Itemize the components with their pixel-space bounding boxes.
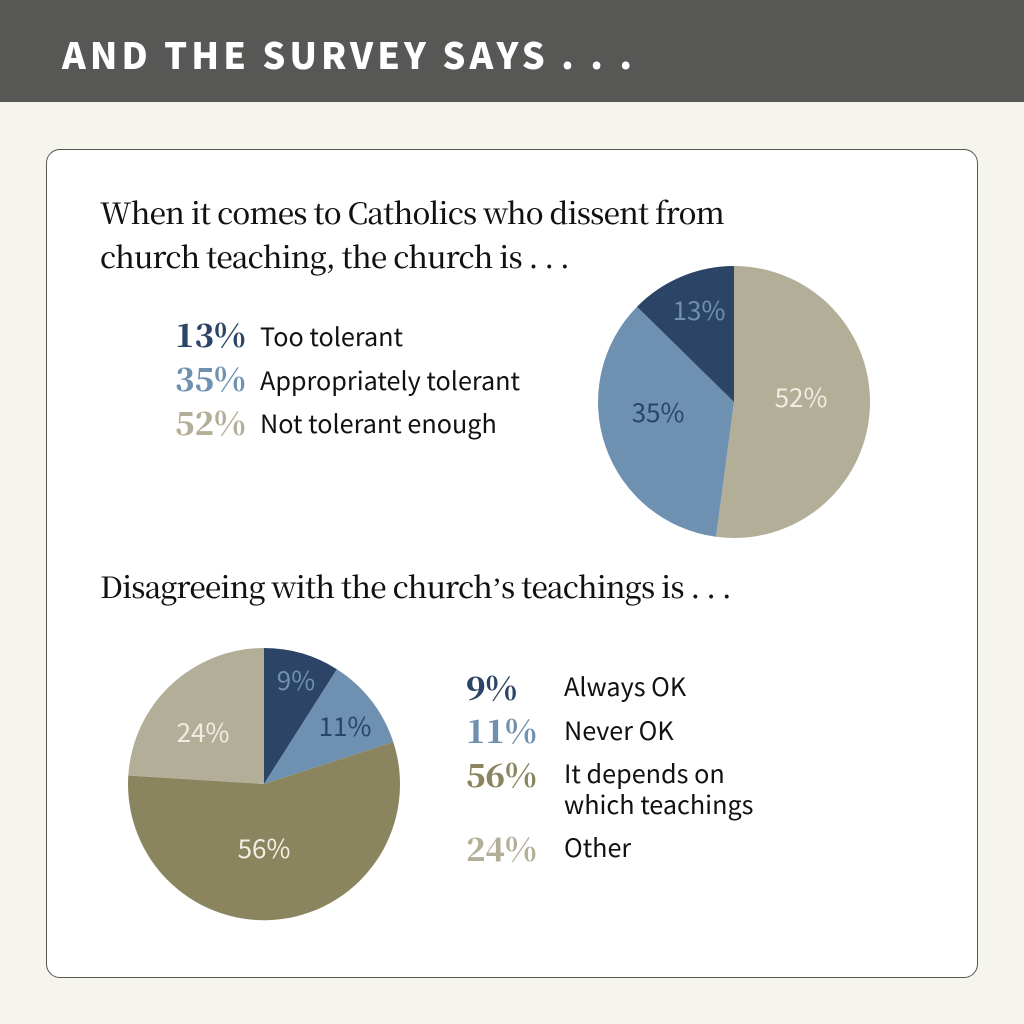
pie chart: question one: 52% [775, 378, 827, 415]
pie chart: question two: 9% [277, 661, 315, 698]
heading: question one: When it comes to Catholics who dissent from [100, 191, 724, 233]
legend value 9%: 9% [466, 664, 517, 710]
legend label never ok: Never OK [564, 712, 674, 748]
legend value 56%: 56% [466, 751, 537, 797]
pie chart: question one: 35% [632, 393, 684, 430]
pie chart: question one: 13% [673, 291, 725, 328]
pie chart: question two: 11% [319, 707, 371, 744]
legend label other: Other [564, 829, 631, 865]
heading: question one: church teaching, the church is . . . [100, 235, 569, 277]
legend: question two [466, 664, 753, 871]
legend value 11%: 11% [466, 707, 537, 753]
legend label it depends on which teachings: It depends on [564, 755, 725, 791]
legend value 52%: 52% [175, 399, 246, 445]
pie chart: question two: 56% [238, 829, 290, 866]
legend: question one [175, 311, 520, 445]
legend value 13%: 13% [175, 311, 246, 357]
legend label always ok: Always OK [564, 668, 686, 704]
legend value 24%: 24% [466, 825, 537, 871]
legend label too tolerant: Too tolerant [260, 318, 403, 354]
legend value 35%: 35% [175, 355, 246, 401]
panel: survey card [46, 149, 978, 978]
heading: question two: Disagreeing with the church’s teachings is . . . [100, 565, 731, 607]
legend label it depends on which teachings [564, 755, 753, 822]
header banner [0, 0, 1024, 102]
legend label appropriately tolerant: Appropriately tolerant [260, 362, 520, 398]
legend label it depends on which teachings: which teachings [564, 786, 753, 822]
pie chart: question two: 24% [177, 713, 229, 750]
legend label not tolerant enough: Not tolerant enough [260, 405, 497, 441]
title: AND THE SURVEY SAYS . . . [62, 28, 636, 80]
heading: question one [100, 191, 724, 277]
